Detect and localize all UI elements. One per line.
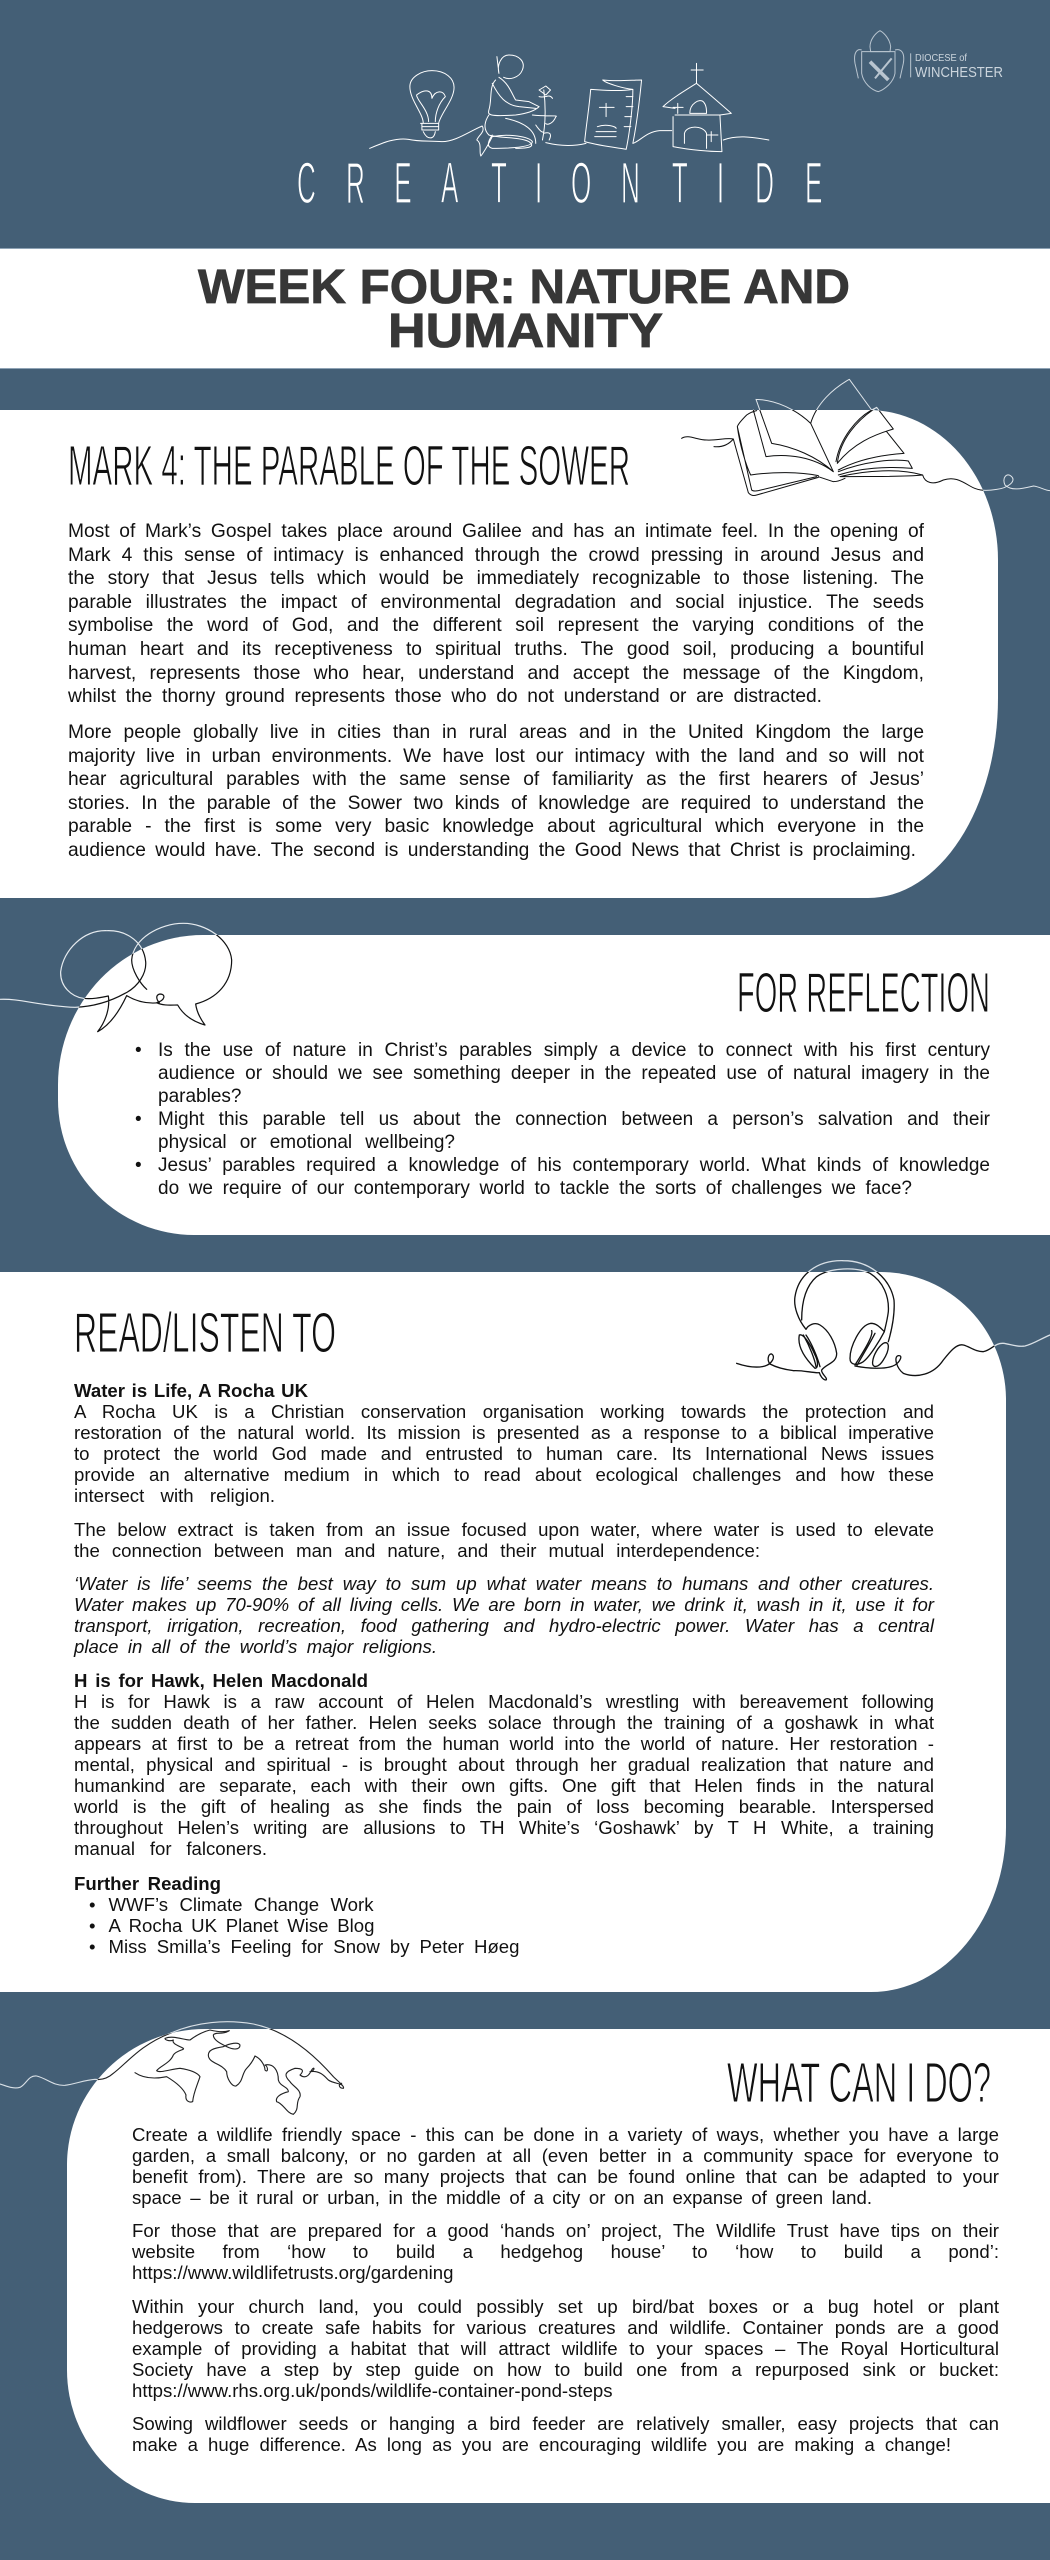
text block: mark 4 first paragraph: harvest, represents those who hear, understand and accept the message of the Kingdom,	[68, 663, 924, 684]
text block: wildlife trust tips: For those that are prepared for a good ‘hands on’ project, The Wildlife Trust have tips on their	[132, 2220, 999, 2240]
text block: mark 4 second paragraph: audience would have. The second is understanding the Good News that Christ is proclaiming.	[68, 840, 916, 861]
quote: water is life extract: Water makes up 70-90% of all living cells. We are born in water, we drink it, wash in it, use it for	[74, 1594, 934, 1614]
text block: church land habitats: Society have a step by step guide on how to build one from a repurposed sink or bucket:	[132, 2358, 999, 2380]
text block: h is for hawk	[74, 1670, 934, 1858]
text block: water is life a rocha uk: restoration of the natural world. Its mission is presented as a response to a biblical imperative	[74, 1422, 934, 1442]
text block: water is life a rocha uk: A Rocha UK is a Christian conservation organisation working towards the protection and	[74, 1400, 934, 1422]
heading: read listen to: READ/LISTEN TO	[74, 1301, 336, 1365]
text block: h is for hawk: world is the gift of healing as she finds the pain of loss becoming bearable. Interspersed	[74, 1796, 934, 1816]
list: reflection questions: physical or emotional wellbeing?	[158, 1132, 455, 1153]
list: further reading: WWF’s Climate Change Work	[108, 1894, 374, 1914]
text block: mark 4 second paragraph: majority live in urban environments. We have lost our intimacy with the land and so will not	[68, 746, 924, 767]
icon: one-line drawing of bulb, gardener, bible and church	[369, 54, 770, 156]
text block: water is life a rocha uk: Water is Life, A Rocha UK	[74, 1380, 308, 1400]
list: further reading: Further Reading	[74, 1872, 221, 1894]
text block: wildlife trust tips	[132, 2220, 999, 2283]
text block: mark 4 first paragraph: whilst the thorny ground represents those who do not understand or are distracted.	[68, 686, 822, 707]
text block: h is for hawk: manual for falconers.	[74, 1838, 267, 1858]
heading: week four nature and humanity: WEEK FOUR: NATURE AND	[198, 261, 850, 314]
text block: mark 4 first paragraph: the story that Jesus tells which would be immediately recognizable to those listening. The	[68, 568, 924, 589]
heading: week four nature and humanity: HUMANITY	[388, 305, 663, 358]
list: further reading: Miss Smilla’s Feeling for Snow by Peter Høeg	[108, 1936, 520, 1956]
panel: read and listen to	[0, 1272, 1006, 1992]
logo: diocese of winchester: WINCHESTER	[915, 64, 1003, 81]
text block: church land habitats	[132, 2296, 999, 2401]
text block: church land habitats: Within your church land, you could possibly set up bird/bat boxes or a bug hotel or plant	[132, 2296, 999, 2316]
quote: water is life extract: place in all of the world’s major religions.	[74, 1636, 437, 1656]
text block: create a wildlife friendly space: benefit from). There are so many projects that can be found online that can be adapted to your	[132, 2166, 999, 2186]
text block: h is for hawk: appears at first to be a retreat from the human world into the world of nature. Her restoration -	[74, 1732, 934, 1754]
text block: extract introduction: the connection between man and nature, and their mutual interdependence:	[74, 1540, 760, 1560]
text block: create a wildlife friendly space: Create a wildlife friendly space - this can be done in a variety of ways, whether you have a large	[132, 2124, 999, 2144]
text block: mark 4 second paragraph	[68, 722, 924, 861]
text block: h is for hawk: humankind are separate, each with their own gifts. One gift that Helen finds in the natural	[74, 1774, 934, 1796]
list: reflection questions: Jesus’ parables required a knowledge of his contemporary world. What kinds of knowledge	[158, 1155, 990, 1176]
logo: diocese of winchester: DIOCESE of	[915, 53, 967, 64]
text block: mark 4 first paragraph	[68, 521, 924, 707]
icon: globe line drawing	[0, 2021, 344, 2115]
text block: mark 4 first paragraph: human heart and its receptiveness to spiritual truths. The good soil, producing a bountiful	[68, 639, 924, 660]
text block: church land habitats: https://www.rhs.org.uk/ponds/wildlife-container-pond-steps	[132, 2380, 613, 2400]
text block: extract introduction: The below extract is taken from an issue focused upon water, where water is used to elevate	[74, 1518, 934, 1540]
header band	[0, 0, 1050, 248]
title: creationtide: CREATIONTIDE	[297, 150, 822, 216]
list: reflection questions: audience or should we see something deeper in the repeated use of natural imagery in the	[158, 1063, 990, 1084]
text block: wildlife trust tips: website from ‘how to build a hedgehog house’ to ‘how to build a pond’:	[132, 2240, 999, 2262]
quote: water is life extract: transport, irrigation, recreation, food gathering and hydro-electric power. Water has a central	[74, 1614, 934, 1636]
icon: open book line drawing	[681, 378, 1050, 496]
list: further reading: •	[89, 1894, 96, 1914]
text block: wildflower seeds and bird feeders: Sowing wildflower seeds or hanging a bird feeder are relatively smaller, easy projects that can	[132, 2412, 999, 2434]
icon: speech bubbles line drawing	[0, 922, 232, 1032]
list: further reading: •	[89, 1914, 96, 1936]
text block: mark 4 first paragraph: symbolise the word of God, and the different soil represent the varying conditions of the	[68, 615, 924, 636]
logo: diocese of winchester	[854, 30, 1003, 92]
list: further reading	[74, 1872, 520, 1957]
text block: mark 4 first paragraph: Mark 4 this sense of intimacy is enhanced through the crowd pressing in around Jesus and	[68, 545, 924, 566]
text block: wildflower seeds and bird feeders: make a huge difference. As long as you are encouraging wildlife you are making a change!	[132, 2434, 951, 2454]
text block: water is life a rocha uk: to protect the world God made and entrusted to human care. Its International News issues	[74, 1442, 934, 1464]
panel: for reflection: •	[135, 1155, 142, 1176]
text block: create a wildlife friendly space: space – be it rural or urban, in the middle of a city or on an expanse of green land.	[132, 2186, 872, 2208]
text block: church land habitats: hedgerows to create safe habits for various creatures and wildlife. Container ponds are a good	[132, 2316, 999, 2338]
text block: h is for hawk: the sudden death of her father. Helen seeks solace through the training of a goshawk in what	[74, 1712, 934, 1732]
heading band: week four	[0, 248, 1050, 369]
text block: wildlife trust tips: https://www.wildlifetrusts.org/gardening	[132, 2262, 453, 2282]
text block: create a wildlife friendly space: garden, a small balcony, or no garden at all (even better in a community space for everyone to	[132, 2144, 999, 2166]
text block: mark 4 first paragraph: Most of Mark’s Gospel takes place around Galilee and has an intimate feel. In the opening of	[68, 521, 924, 542]
text block: wildflower seeds and bird feeders	[132, 2412, 999, 2455]
quote: water is life extract: ‘Water is life’ seems the best way to sum up what water means to humans and other creatures.	[74, 1572, 934, 1594]
text block: water is life a rocha uk: intersect with religion.	[74, 1484, 275, 1506]
text block: mark 4 second paragraph: stories. In the parable of the Sower two kinds of knowledge are required to understand the	[68, 793, 924, 814]
text block: water is life a rocha uk	[74, 1380, 934, 1506]
text block: mark 4 second paragraph: parable - the first is some very basic knowledge about agricultural which everyone in the	[68, 816, 924, 837]
text block: h is for hawk: H is for Hawk is a raw account of Helen Macdonald’s wrestling with bereavement following	[74, 1690, 934, 1712]
text block: church land habitats: example of providing a habitat that will attract wildlife to your spaces – The Royal Horticultural	[132, 2338, 999, 2358]
heading: week four nature and humanity	[198, 261, 850, 358]
list: reflection questions: Might this parable tell us about the connection between a person’s salvation and their	[158, 1109, 990, 1130]
panel: for reflection	[58, 935, 1050, 1235]
panel: what can i do	[67, 2029, 1050, 2503]
text block: mark 4 second paragraph: More people globally live in cities than in rural areas and in the United Kingdom the large	[68, 722, 924, 743]
list: reflection questions: Is the use of nature in Christ’s parables simply a device to connect with his first century	[158, 1040, 990, 1060]
panel: for reflection: •	[135, 1109, 142, 1130]
text block: h is for hawk: H is for Hawk, Helen Macdonald	[74, 1670, 368, 1690]
list: further reading: •	[89, 1936, 96, 1956]
panel: mark 4 parable of the sower	[0, 410, 998, 898]
list: reflection questions	[135, 1040, 990, 1199]
text block: water is life a rocha uk: provide an alternative medium in which to read about ecological challenges and how these	[74, 1464, 934, 1484]
text block: create a wildlife friendly space	[132, 2124, 999, 2208]
text block: extract introduction	[74, 1518, 934, 1561]
list: reflection questions: do we require of our contemporary world to tackle the sorts of challenges we face?	[158, 1178, 912, 1199]
quote: water is life extract	[74, 1572, 935, 1657]
text block: mark 4 first paragraph: parable illustrates the impact of environmental degradation and social injustice. The seeds	[68, 592, 924, 613]
list: further reading: A Rocha UK Planet Wise Blog	[108, 1914, 374, 1936]
icon: headphones line drawing	[736, 1260, 1050, 1381]
text block: h is for hawk: throughout Helen’s writing are allusions to TH White’s ‘Goshawk’ by T H White, a training	[74, 1816, 934, 1838]
panel: for reflection: •	[135, 1040, 142, 1060]
text block: mark 4 second paragraph: hear agricultural parables with the same sense of familiarity as the first hearers of Jesus’	[68, 769, 924, 790]
list: reflection questions: parables?	[158, 1086, 241, 1107]
text block: h is for hawk: mental, physical and spiritual - is brought about through her gradual realization that nature and	[74, 1754, 934, 1774]
